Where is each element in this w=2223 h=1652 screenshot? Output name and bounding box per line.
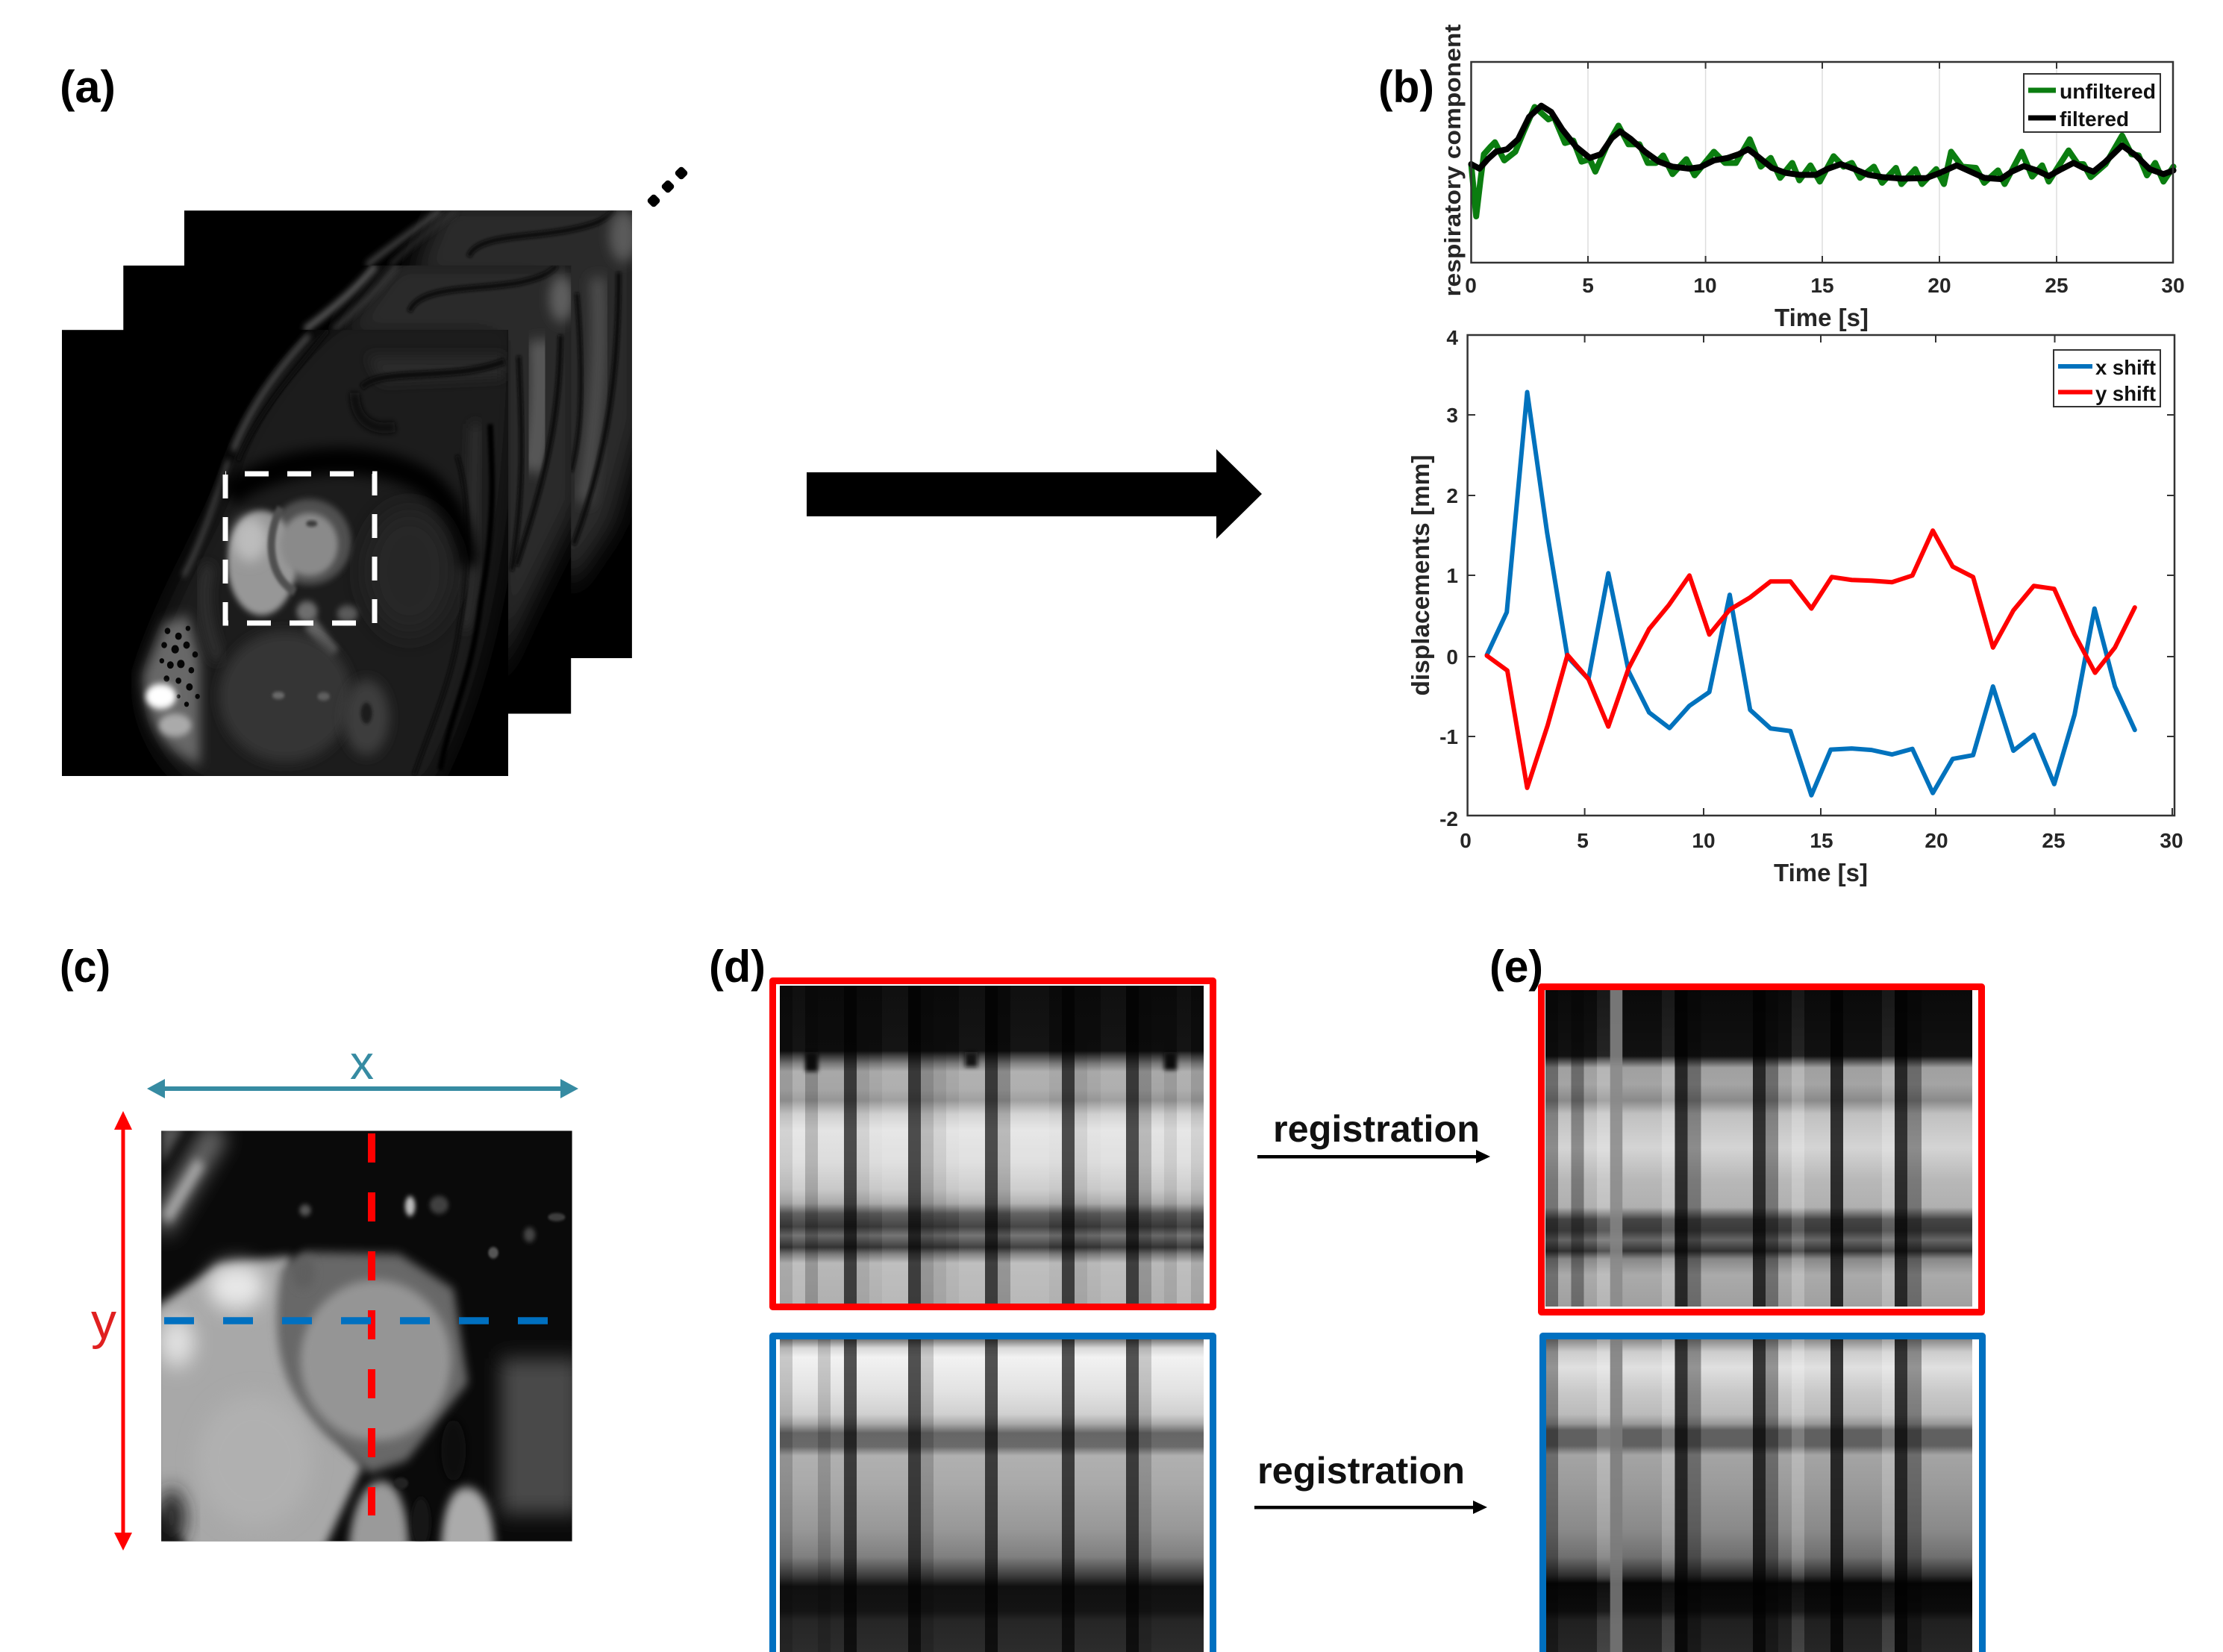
y tick labels: -2 — [1439, 807, 1458, 830]
image: cropped heart MRI — [153, 1125, 580, 1559]
legend: unfiltered — [2060, 80, 2156, 103]
x tick labels: 0 — [1465, 274, 1477, 297]
x axis letter: x — [350, 1036, 374, 1089]
frame: red — [773, 980, 1213, 1307]
image: middle MRI slice — [123, 257, 581, 713]
x axis title: Time [s] — [1774, 859, 1868, 886]
chart: respiratory component — [1439, 25, 2185, 331]
y tick labels — [1439, 326, 1458, 830]
registration label, top: registration — [1273, 1108, 1480, 1150]
legend — [2054, 350, 2160, 407]
arrow: x axis — [147, 1079, 578, 1098]
panel c: cropped heart with profile lines — [91, 1036, 580, 1559]
y axis title: displacements [mm] — [1407, 455, 1434, 695]
label (a): (a) — [60, 62, 116, 112]
x tick labels: 15 — [1810, 274, 1834, 297]
x tick labels: 25 — [2042, 829, 2066, 852]
y tick labels: 4 — [1446, 326, 1458, 349]
y tick labels: 3 — [1446, 404, 1458, 427]
y tick labels: -1 — [1439, 725, 1458, 748]
image: front MRI slice — [62, 314, 519, 791]
frame: blue — [773, 1336, 1213, 1652]
image: unregistered x profile stack — [780, 1339, 1204, 1652]
frame: red — [1542, 986, 1982, 1312]
x tick labels: 20 — [1925, 829, 1948, 852]
x tick labels: 5 — [1582, 274, 1594, 297]
y tick labels: 1 — [1446, 564, 1458, 587]
legend: x shift — [2095, 356, 2156, 379]
panel d: top x-t image in red frame — [773, 980, 1213, 1307]
plot frame — [1472, 62, 2173, 263]
x tick labels — [1465, 274, 2185, 297]
plot frame — [1468, 335, 2174, 816]
x tick labels: 0 — [1460, 829, 1472, 852]
series: x shift and y shift — [1487, 392, 2135, 795]
x tick labels: 5 — [1577, 829, 1589, 852]
image: registered y profile stack — [1545, 989, 1972, 1307]
icon: continuation dots — [646, 166, 689, 208]
x tick labels — [1460, 829, 2183, 852]
chart: displacements — [1407, 326, 2183, 886]
legend — [2024, 74, 2160, 132]
x tick labels: 30 — [2160, 829, 2183, 852]
image: back MRI slice — [184, 199, 642, 658]
x tick labels: 25 — [2045, 274, 2069, 297]
y axis letter: y — [91, 1293, 116, 1350]
big arrow from (a) to (b) — [807, 449, 1262, 539]
arrow: y axis — [114, 1111, 132, 1551]
panel d: bottom x-t image in blue frame — [773, 1336, 1213, 1652]
dashed region of interest — [225, 474, 375, 623]
x axis title: Time [s] — [1775, 304, 1869, 331]
image: unregistered y profile stack — [780, 986, 1204, 1304]
y tick labels: 2 — [1446, 484, 1458, 507]
panel e: top registered image in red frame — [1542, 986, 1982, 1312]
dashed vertical profile line — [368, 1133, 375, 1515]
x tick labels: 20 — [1927, 274, 1951, 297]
registration label, bottom: registration — [1257, 1450, 1465, 1492]
legend: filtered — [2060, 107, 2129, 131]
label (b): (b) — [1378, 62, 1434, 112]
arrow: top registration — [1257, 1150, 1490, 1163]
series: unfiltered and filtered curves — [1472, 106, 2174, 216]
panel a: stack of MRI slices — [62, 166, 689, 791]
label (c): (c) — [60, 942, 110, 992]
label (d): (d) — [709, 942, 766, 992]
x tick labels: 10 — [1693, 274, 1717, 297]
dashed horizontal profile line — [164, 1317, 548, 1324]
frame: blue — [1543, 1336, 1982, 1652]
x tick labels: 30 — [2161, 274, 2185, 297]
grid and ticks — [1588, 62, 2057, 263]
legend: y shift — [2095, 382, 2156, 405]
ticks — [1468, 335, 2174, 816]
x tick labels: 15 — [1810, 829, 1833, 852]
x tick labels: 10 — [1692, 829, 1716, 852]
label (e): (e) — [1489, 942, 1543, 992]
y axis title: respiratory component — [1439, 25, 1466, 296]
y tick labels: 0 — [1446, 645, 1458, 669]
arrow: bottom registration — [1254, 1501, 1487, 1514]
image: registered x profile stack — [1545, 1339, 1972, 1652]
panel e: bottom registered image in blue frame — [1543, 1336, 1982, 1652]
